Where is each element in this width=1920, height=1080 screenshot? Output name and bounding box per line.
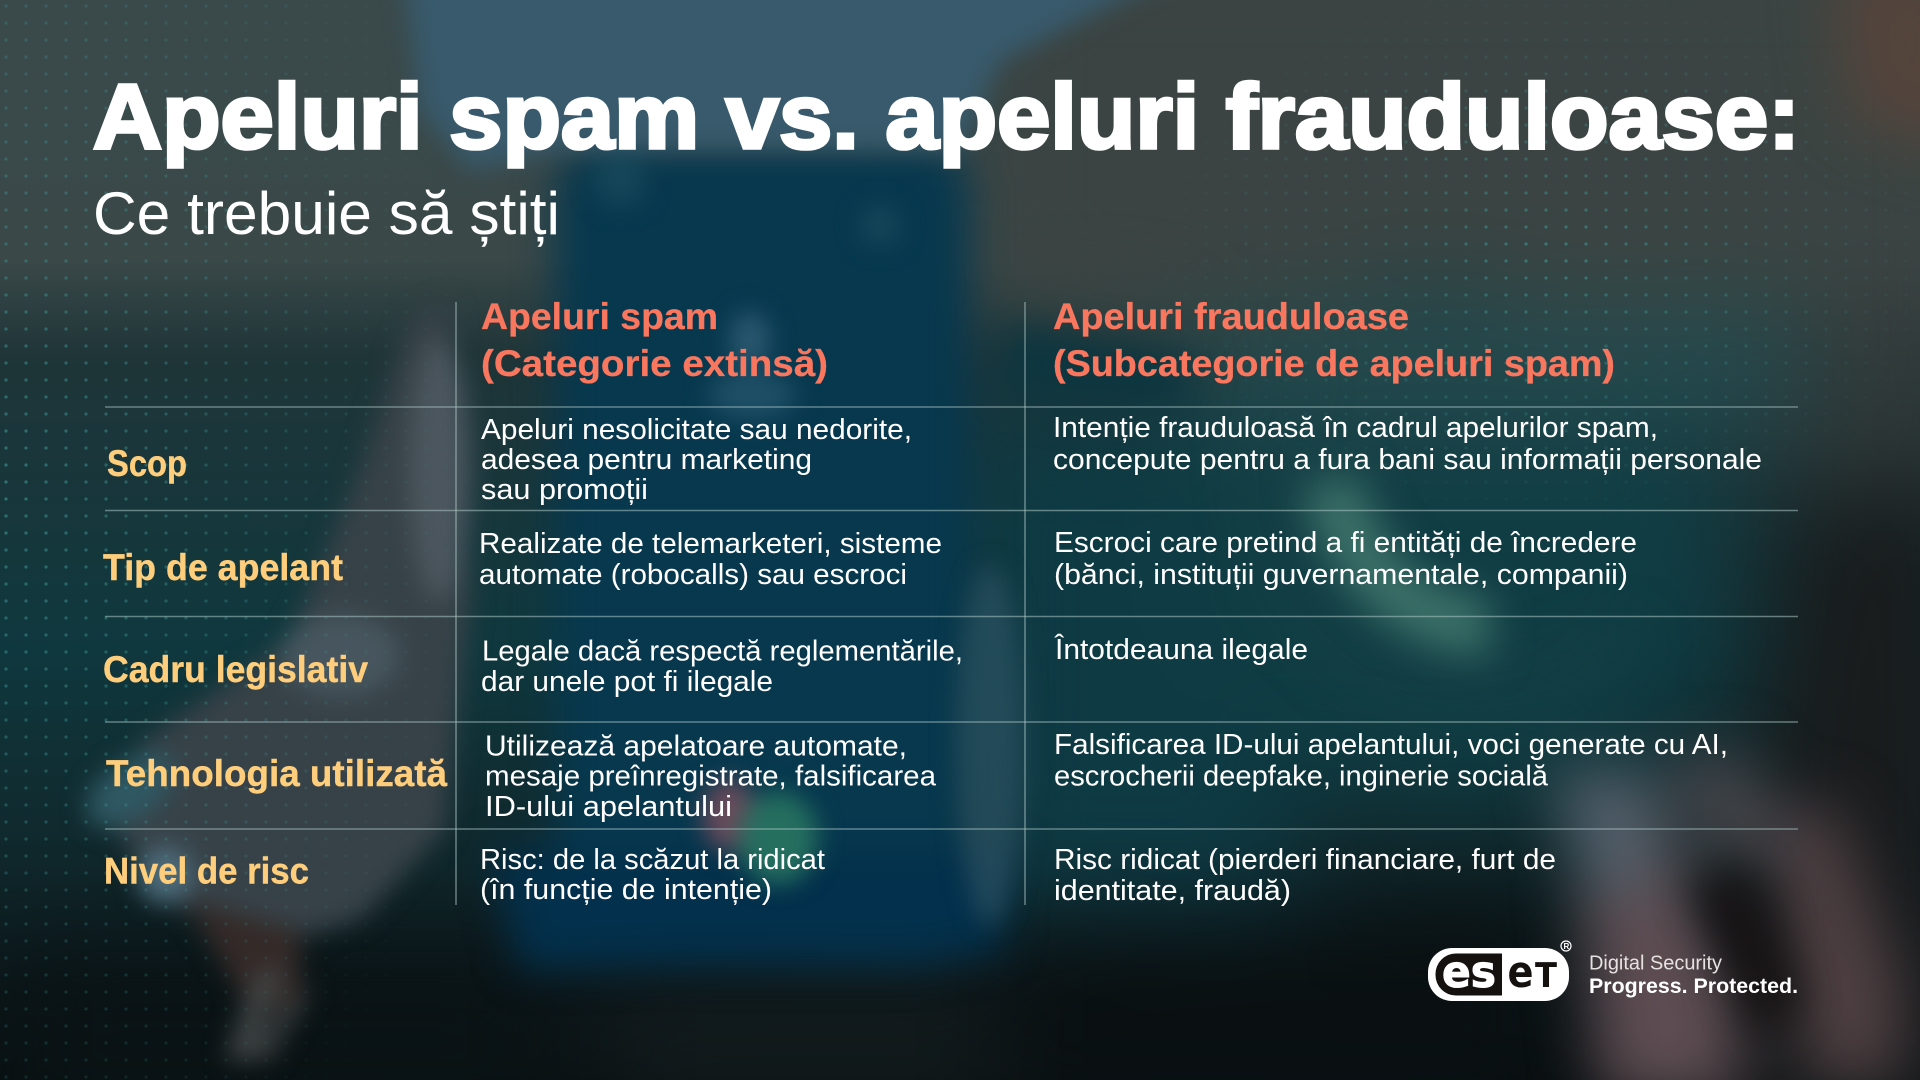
row: Tip de apelant	[103, 527, 1637, 591]
tagline: Digital Security	[1589, 952, 1722, 974]
row: Tehnologia utilizată: Tehnologia utilizată	[106, 753, 447, 794]
row: Nivel de risc: Risc ridicat (pierderi financiare, furt de	[1054, 844, 1556, 876]
column header: fraud calls	[1053, 296, 1615, 384]
row: Nivel de risc: Risc: de la scăzut la ridicat	[480, 844, 825, 876]
tagline	[1589, 952, 1798, 998]
ESET logo	[1428, 941, 1571, 1001]
row: Tehnologia utilizată: escrocherii deepfake, inginerie socială	[1054, 760, 1549, 792]
column header: spam calls: Apeluri spam	[481, 296, 718, 337]
row: Cadru legislativ: Legale dacă respectă reglementările,	[482, 636, 963, 668]
tagline: Progress. Protected.	[1589, 975, 1798, 998]
row: Tip de apelant: Escroci care pretind a fi entități de încredere	[1054, 527, 1637, 559]
row: Scop: concepute pentru a fura bani sau informații personale	[1053, 444, 1762, 476]
row: Scop: Apeluri nesolicitate sau nedorite,	[481, 414, 912, 446]
row: Scop: Intenție frauduloasă în cadrul apelurilor spam,	[1053, 412, 1658, 444]
row: Nivel de risc: Nivel de risc	[104, 850, 309, 892]
column header: spam calls	[481, 296, 828, 384]
row: Tehnologia utilizată: Falsificarea ID-ului apelantului, voci generate cu AI,	[1054, 729, 1728, 761]
row: Scop: adesea pentru marketing	[481, 444, 812, 476]
row: Tehnologia utilizată: mesaje preînregistrate, falsificarea	[485, 760, 937, 792]
row: Cadru legislativ: Întotdeauna ilegale	[1054, 633, 1308, 666]
row: Tip de apelant: Tip de apelant	[103, 547, 343, 588]
row: Tip de apelant: Realizate de telemarketeri, sisteme	[479, 528, 942, 560]
row: Nivel de risc	[104, 844, 1556, 907]
row: Tip de apelant: automate (robocalls) sau escroci	[479, 559, 907, 591]
column header: fraud calls: Apeluri frauduloase	[1053, 296, 1409, 337]
ESET logo: R	[1564, 942, 1570, 951]
row: Scop: sau promoții	[481, 474, 648, 506]
row: Tip de apelant: (bănci, instituții guvernamentale, companii)	[1054, 559, 1628, 591]
decorative dot pattern right	[1224, 22, 1888, 484]
row: Tehnologia utilizată	[106, 729, 1728, 823]
row: Tehnologia utilizată: Utilizează apelatoare automate,	[485, 730, 907, 762]
row: Cadru legislativ: Cadru legislativ	[103, 649, 368, 690]
decorative dot pattern left	[4, 4, 408, 1078]
table grid lines	[105, 302, 1798, 905]
row: Cadru legislativ: dar unele pot fi ilegale	[481, 666, 773, 698]
row: Tehnologia utilizată: ID-ului apelantului	[485, 791, 732, 823]
column header: fraud calls: (Subcategorie de apeluri spam)	[1053, 343, 1615, 384]
ESET logo: T	[1535, 956, 1558, 996]
row: Cadru legislativ	[103, 633, 1308, 698]
subtitle: Ce trebuie să știți	[93, 180, 560, 247]
ESET logo: es	[1442, 947, 1496, 998]
row: Scop: Scop	[107, 443, 187, 484]
row: Nivel de risc: identitate, fraudă)	[1054, 875, 1291, 907]
row: Scop	[107, 412, 1762, 506]
ESET logo: e	[1508, 947, 1534, 998]
title: Apeluri spam vs. apeluri frauduloase:	[93, 66, 1800, 168]
column header: spam calls: (Categorie extinsă)	[481, 343, 828, 384]
row: Nivel de risc: (în funcție de intenție)	[480, 874, 772, 906]
